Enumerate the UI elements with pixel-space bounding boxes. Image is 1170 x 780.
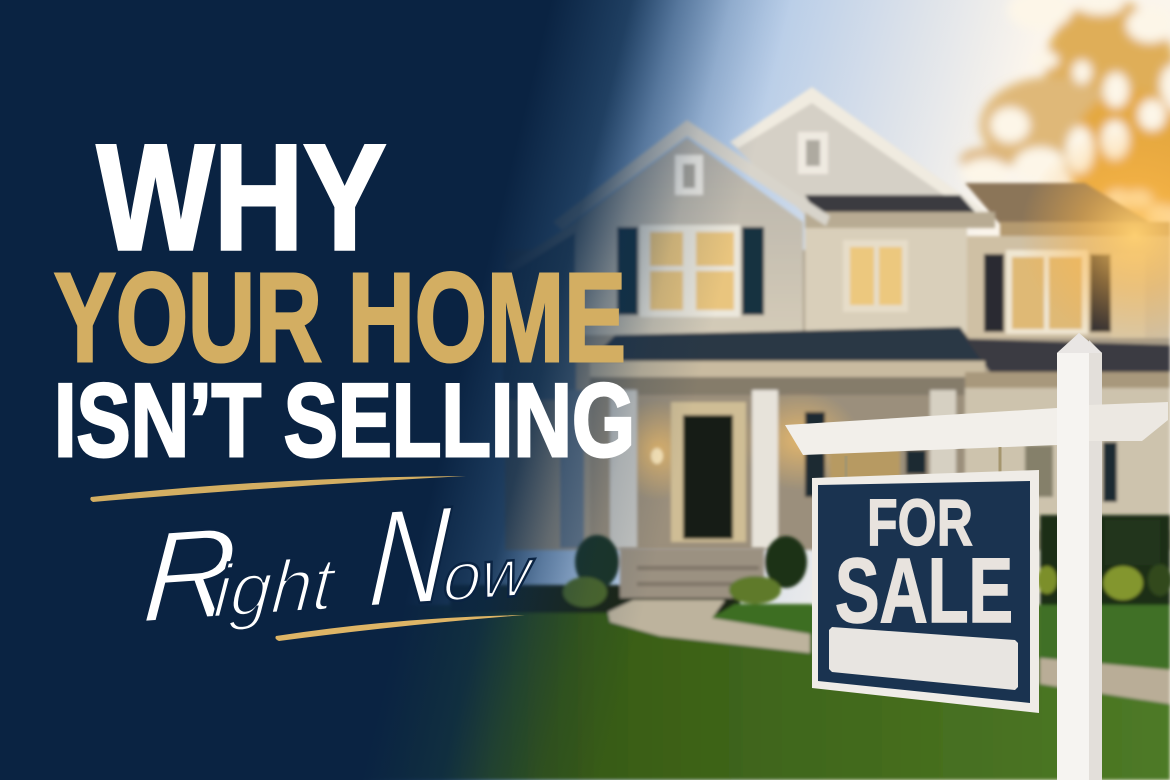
title line: isn't selling: ISN’T SELLING [54, 363, 635, 479]
script subtitle: ow [441, 534, 538, 616]
tree with sunlight [960, 0, 1170, 230]
title [54, 113, 635, 479]
for-sale sign board [812, 470, 1039, 713]
lawn and path [0, 515, 1170, 780]
sign text: for: FOR [867, 485, 973, 559]
front gable [575, 138, 803, 335]
windows porch [805, 412, 825, 497]
steps [620, 548, 764, 598]
sign blank plate [829, 627, 1018, 690]
left lower wing [503, 222, 576, 400]
script subtitle: ight [211, 542, 340, 633]
sign text: sale: SALE [835, 540, 1013, 642]
sign hooks [846, 447, 1000, 482]
title line: why: WHY [97, 113, 386, 281]
porch roofs [590, 327, 985, 361]
upper right gable [730, 87, 993, 217]
gold underline [90, 476, 466, 502]
right brown roof [965, 183, 1170, 235]
for-sale sign post [785, 333, 1168, 780]
porch walls [590, 395, 965, 550]
sun glow [1020, 125, 1170, 345]
gold underline small [275, 615, 525, 641]
script subtitle [139, 472, 542, 652]
house [503, 87, 1170, 550]
title line: your home: YOUR HOME [54, 247, 626, 388]
script subtitle: R [139, 501, 241, 650]
columns [752, 390, 778, 548]
script subtitle: N [365, 478, 455, 636]
door [671, 402, 746, 542]
